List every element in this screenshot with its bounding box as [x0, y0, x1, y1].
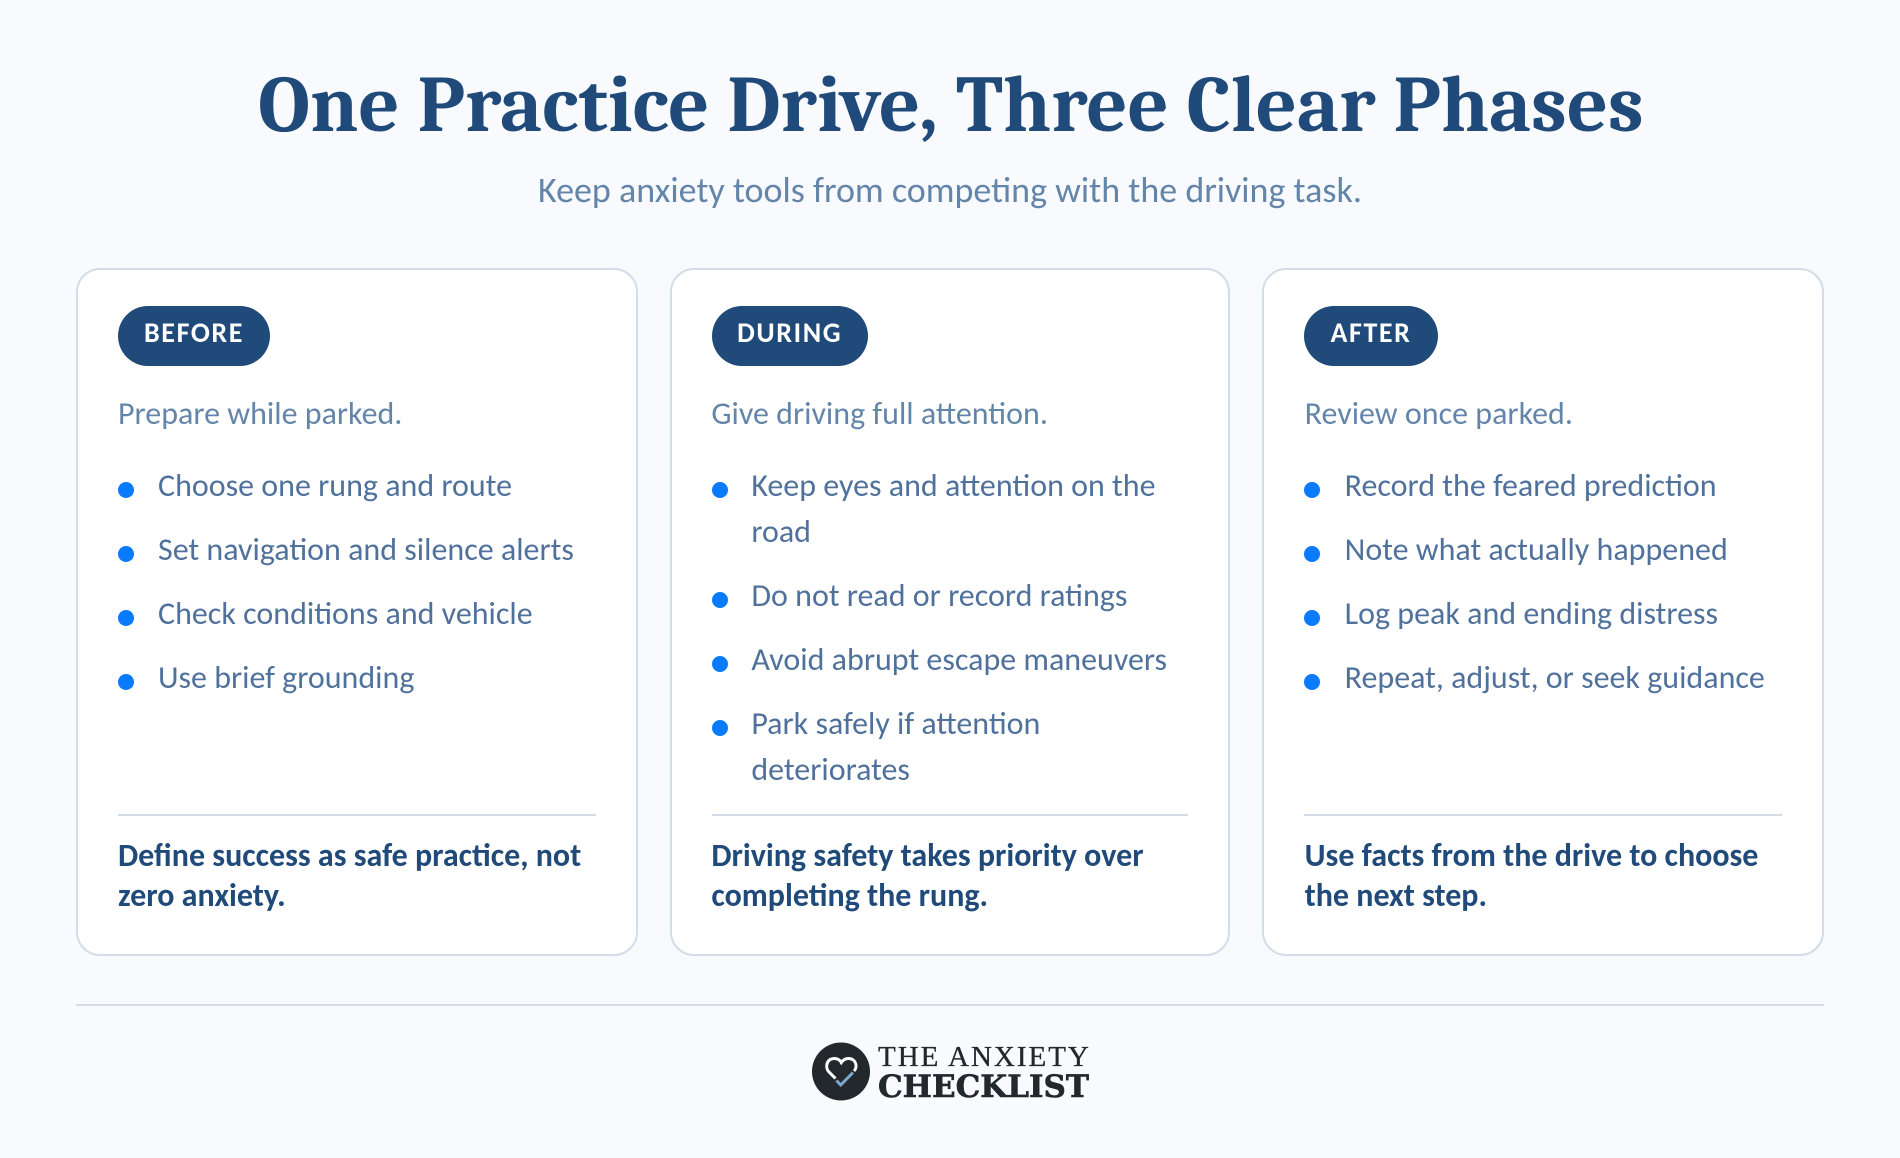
- takeaway: after: the next step.: [1305, 876, 1487, 915]
- checklist: during: [712, 466, 1167, 789]
- panel: during: [670, 268, 1230, 956]
- checklist: after: Record the feared prediction: [1345, 466, 1717, 505]
- badge: before: BEFORE: [144, 315, 244, 350]
- checklist: during: Avoid abrupt escape maneuvers: [751, 640, 1167, 679]
- checklist: after: Log peak and ending distress: [1345, 594, 1718, 633]
- subtitle: Keep anxiety tools from competing with the driving task.: [538, 168, 1362, 212]
- checklist: before: Set navigation and silence alerts: [158, 530, 574, 569]
- takeaway: during: [711, 836, 1144, 915]
- checklist: after: Note what actually happened: [1345, 530, 1728, 569]
- takeaway: after: [1304, 836, 1758, 915]
- wordmark: CHECKLIST: [878, 1069, 1089, 1105]
- takeaway: during: Driving safety takes priority over: [711, 836, 1144, 875]
- checklist: during: Keep eyes and attention on the: [751, 466, 1155, 505]
- checklist: before: [118, 466, 574, 697]
- takeaway: before: [118, 836, 581, 915]
- checklist: after: [1304, 466, 1765, 697]
- title: One Practice Drive, Three Clear Phases: [258, 59, 1644, 151]
- badge: after: AFTER: [1330, 315, 1412, 350]
- checklist: before: Use brief grounding: [158, 658, 414, 697]
- panel: after: [1262, 268, 1824, 956]
- icon: heart with check: [812, 1042, 870, 1100]
- lead text: after: Review once parked.: [1305, 394, 1573, 433]
- checklist: during: deteriorates: [751, 750, 910, 789]
- badge: after: [1304, 306, 1438, 366]
- checklist: during: Park safely if attention: [751, 704, 1040, 743]
- checklist: after: Repeat, adjust, or seek guidance: [1345, 658, 1765, 697]
- takeaway: before: Define success as safe practice, not: [118, 836, 581, 875]
- panel: before: [76, 268, 638, 956]
- checklist: before: Check conditions and vehicle: [158, 594, 533, 633]
- checklist: during: road: [751, 512, 811, 551]
- footer logo: [812, 1041, 1091, 1105]
- badge: during: [712, 306, 868, 366]
- takeaway: after: Use facts from the drive to choose: [1305, 836, 1758, 875]
- badge: before: [118, 306, 270, 366]
- lead text: before: Prepare while parked.: [118, 394, 402, 433]
- checklist: during: Do not read or record ratings: [751, 576, 1127, 615]
- badge: during: DURING: [737, 315, 842, 350]
- wordmark: THE ANXIETY: [878, 1041, 1091, 1073]
- takeaway: before: zero anxiety.: [118, 876, 286, 915]
- wordmark: [878, 1041, 1091, 1105]
- lead text: during: Give driving full attention.: [711, 394, 1048, 433]
- takeaway: during: completing the rung.: [711, 876, 988, 915]
- checklist: before: Choose one rung and route: [158, 466, 512, 505]
